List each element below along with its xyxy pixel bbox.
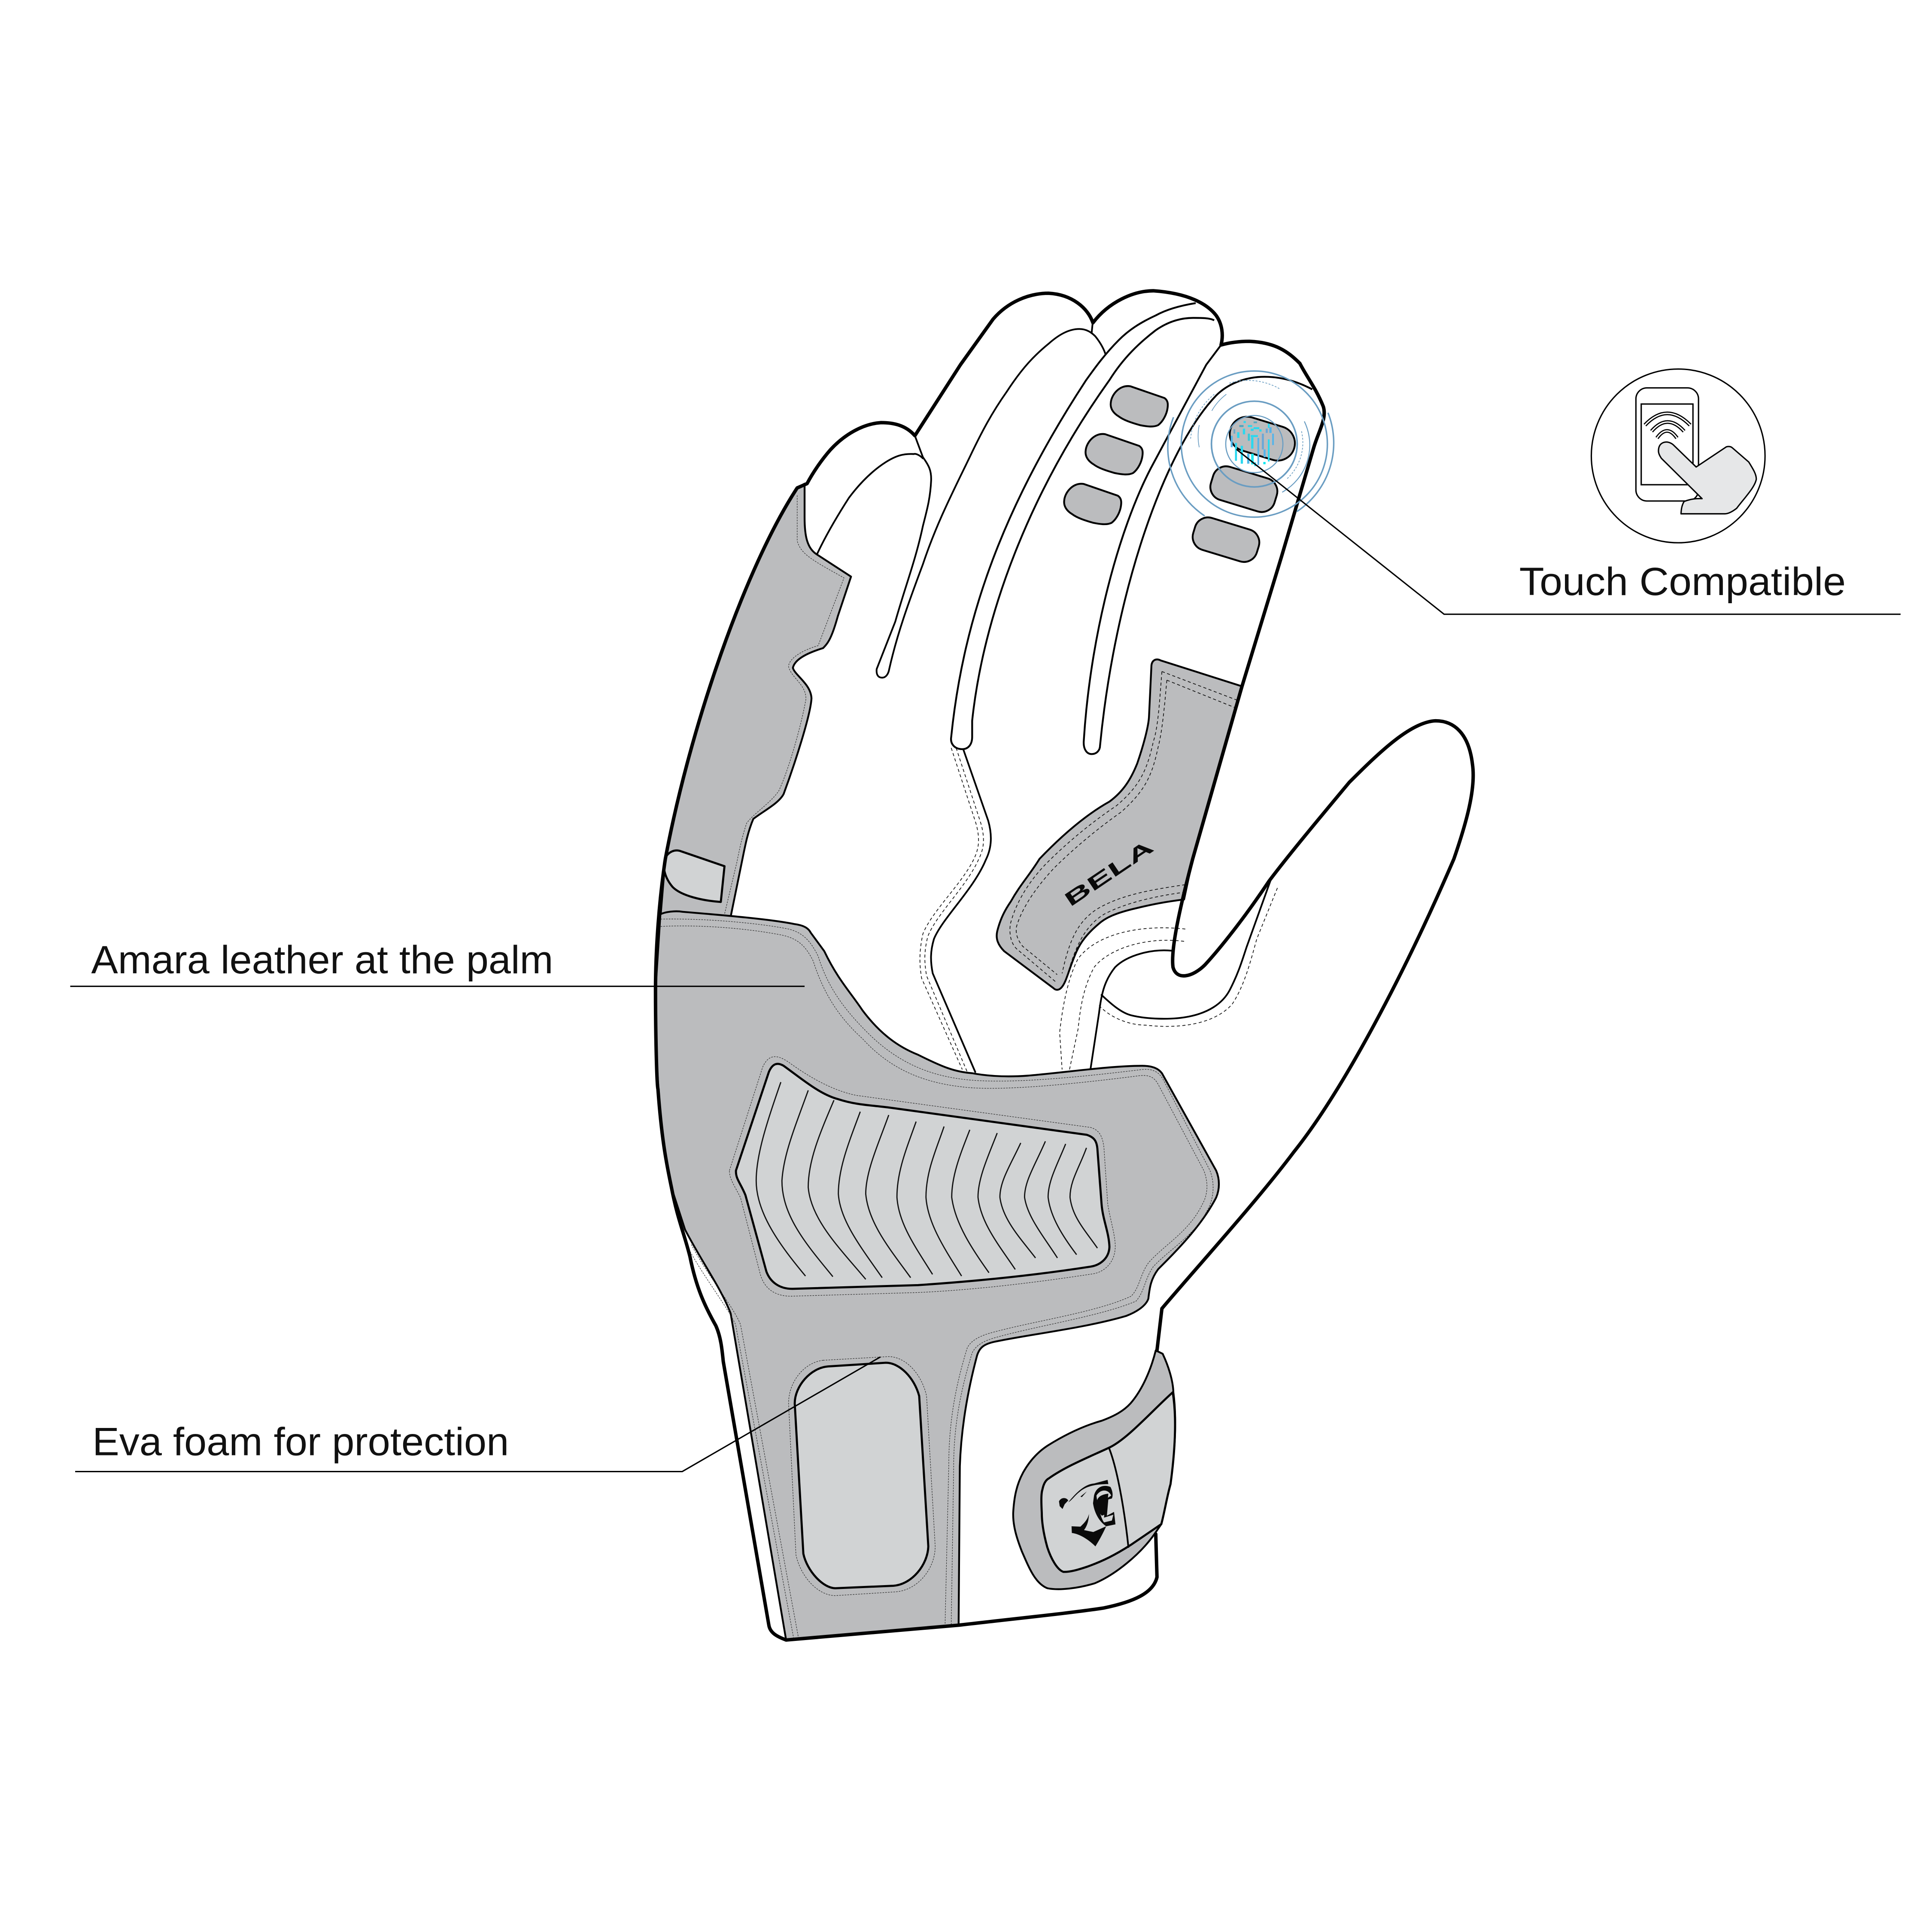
leader line: eva foam [75, 1357, 881, 1472]
Bela panel stitching [1010, 671, 1239, 982]
strap tab outer [1013, 1350, 1175, 1589]
small knuckle patch [664, 851, 725, 902]
pad 2 [1085, 434, 1143, 474]
label: touch compatible: Touch Compatible [1519, 560, 1846, 604]
icon: bear logo [1059, 1480, 1115, 1546]
pinky fingertip line [817, 454, 923, 554]
panel: eva foam protector [795, 1363, 928, 1588]
finger slot: ring and middle [951, 303, 1214, 749]
panel: finger side guard [660, 483, 851, 918]
ripple circles [1168, 371, 1334, 517]
phone body [1636, 388, 1698, 501]
palm stitching [658, 919, 1213, 1637]
phone screen [1641, 404, 1693, 485]
icon circle [1591, 369, 1765, 543]
glove outline [656, 291, 1473, 1640]
pointing hand [1659, 442, 1756, 514]
finger guard stitching [725, 495, 844, 914]
label: eva foam: Eva foam for protection [92, 1420, 509, 1464]
glove base shape [656, 291, 1473, 1640]
pad 2 [1207, 463, 1281, 515]
glove illustration [656, 291, 1473, 1640]
leader line: amara leather [70, 986, 805, 987]
finger pads: index finger [1189, 413, 1299, 565]
pad touch [1225, 413, 1299, 465]
center seam and thumb web stitching [920, 748, 1278, 1072]
touch ripple and fingerprint [1168, 371, 1334, 517]
fingerprint [1230, 421, 1274, 466]
panel: Bela finger panel [996, 659, 1242, 990]
panel: palm pad [736, 1064, 1109, 1289]
wrist strap [1013, 1350, 1175, 1589]
wifi waves [1645, 413, 1690, 438]
panel: amara leather palm [656, 911, 1219, 1640]
Bela logo text: BELA [1060, 835, 1157, 911]
label: amara leather: Amara leather at the palm [91, 938, 553, 982]
finger slot: middle and index [1084, 345, 1312, 754]
icon: touch compatible phone [1591, 369, 1765, 543]
finger pads: middle finger [1064, 386, 1168, 524]
pad 3 [1189, 514, 1263, 565]
strap tab inner [1042, 1392, 1175, 1572]
pad 1 [1111, 386, 1168, 426]
leader line: touch compatible [1236, 450, 1901, 614]
finger junction line [1092, 320, 1093, 333]
palm pad ribs [756, 1082, 1097, 1279]
eva foam stitching [789, 1357, 935, 1596]
pad 3 [1064, 484, 1121, 524]
palm pad stitching [729, 1057, 1115, 1296]
strap divider [1109, 1448, 1128, 1547]
finger slot: pinky and ring [877, 329, 1106, 677]
